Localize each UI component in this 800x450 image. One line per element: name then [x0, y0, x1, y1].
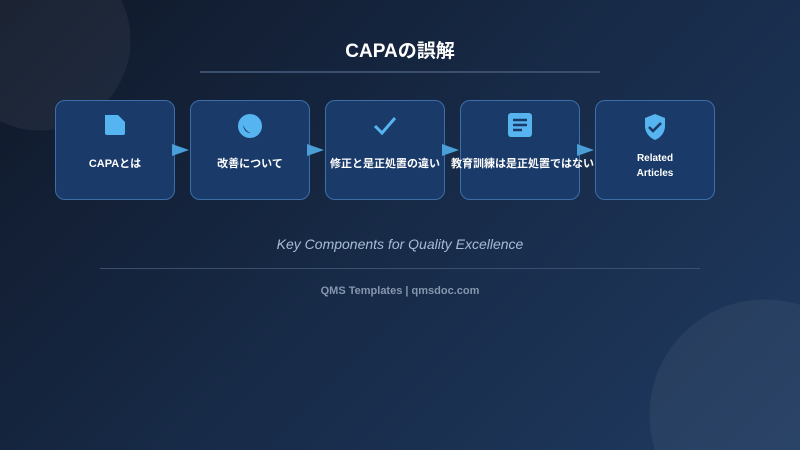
box 2: [190, 100, 310, 200]
label: 教育訓練は是正処置ではない: [451, 158, 594, 170]
label: Articles: [637, 168, 673, 179]
subtitle: Key Components for Quality Excellence: [277, 236, 523, 252]
icon: circle: [238, 114, 262, 138]
label: CAPAとは: [89, 158, 141, 170]
label: [636, 153, 673, 179]
arrow 2: [307, 144, 324, 156]
footer: QMS Templates | qmsdoc.com: [321, 285, 479, 297]
arrow 4: [577, 144, 594, 156]
label: Related: [637, 153, 673, 164]
label: 修正と是正処置の違い: [330, 158, 440, 170]
box 3: [325, 100, 445, 200]
box 4: [460, 100, 580, 200]
label: 改善について: [217, 158, 283, 170]
icon: shield: [645, 114, 665, 140]
icon: document: [105, 115, 125, 135]
box 5: [595, 100, 715, 200]
arrow 1: [172, 144, 189, 156]
icon: check: [374, 117, 396, 136]
title: CAPAの誤解: [345, 41, 455, 62]
box 1: [55, 100, 175, 200]
icon: list: [508, 113, 532, 137]
arrow 3: [442, 144, 459, 156]
